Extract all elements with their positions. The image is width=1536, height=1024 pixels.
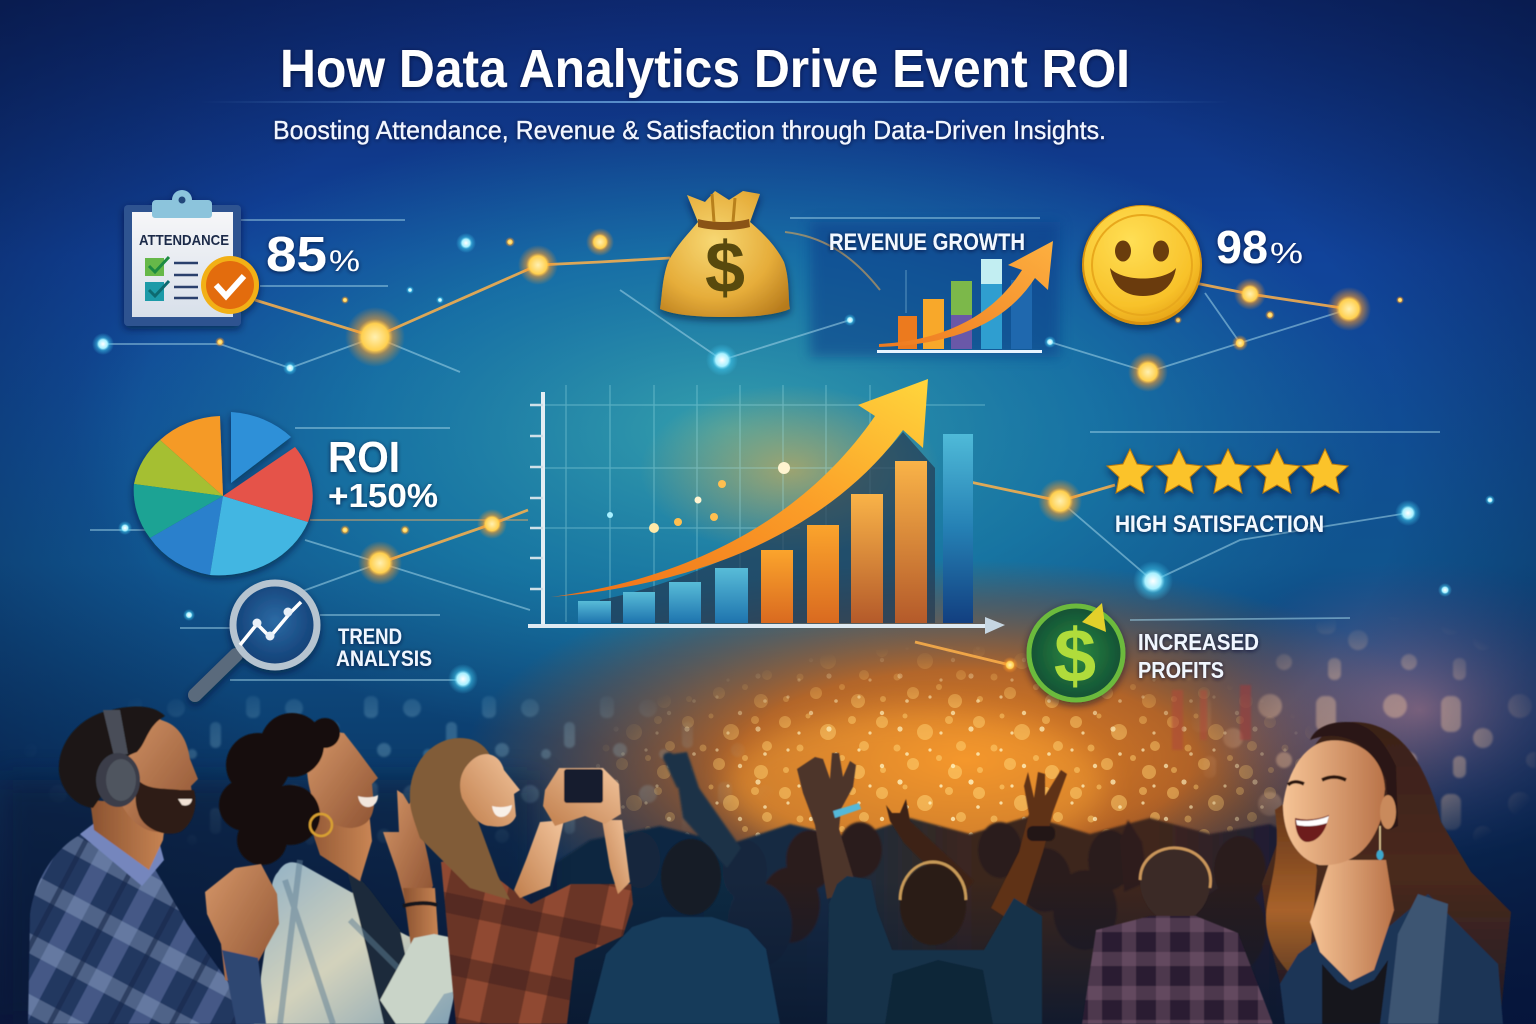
icon: smiley face xyxy=(1082,205,1202,325)
bokeh lights of the crowd xyxy=(168,624,1536,843)
increased profits label: INCREASED xyxy=(1138,629,1259,655)
stat: ROI +150%: +150% xyxy=(328,477,438,514)
stat: 98%: 98 xyxy=(1216,221,1268,273)
icon: increased profits coin xyxy=(1029,603,1123,700)
network connection lines xyxy=(90,218,1440,680)
central bar chart xyxy=(528,379,1005,634)
crowd member in plaid shirt xyxy=(1082,848,1273,1024)
high satisfaction label: HIGH SATISFACTION xyxy=(1115,511,1324,538)
icon: attendance clipboard: ATTENDANCE xyxy=(139,232,229,249)
chart background glow xyxy=(640,385,940,555)
network nodes xyxy=(92,228,1495,694)
icon: attendance clipboard xyxy=(124,190,259,326)
icon: magnifying glass trend xyxy=(195,583,317,695)
title underline xyxy=(200,101,1230,103)
chart: revenue growth xyxy=(877,241,1053,353)
stat: 85%: % xyxy=(329,245,360,278)
icon: money bag xyxy=(660,191,790,317)
trend analysis label: TREND xyxy=(338,624,402,649)
person: woman with curly hair xyxy=(219,713,468,1024)
icon: money bag: $ xyxy=(705,228,745,308)
subtitle: Boosting Attendance, Revenue & Satisfaction through Data-Driven Insights. xyxy=(273,115,1106,145)
stat: ROI +150%: ROI xyxy=(328,433,400,482)
increased profits label: PROFITS xyxy=(1138,657,1224,683)
background crowd silhouettes xyxy=(530,752,1310,1024)
person: woman taking a photo xyxy=(410,738,633,1024)
stat: 85%: 85 xyxy=(266,228,327,282)
trend analysis label: ANALYSIS xyxy=(336,646,432,671)
revenue panel shade xyxy=(810,222,1060,357)
trend analysis label xyxy=(336,624,432,671)
icon: increased profits coin: $ xyxy=(1054,614,1096,699)
crowd member with raised hands xyxy=(797,753,1067,1024)
icon: five stars xyxy=(1107,449,1348,493)
crowd member: man in blue shirt seen from behind xyxy=(588,839,780,1024)
person: man with headphones xyxy=(28,706,262,1024)
stat: 98%: % xyxy=(1270,238,1303,270)
increased profits label xyxy=(1138,629,1259,683)
stat: 85% xyxy=(266,228,360,282)
person: clapping man's hands xyxy=(205,864,279,1024)
stat: 98% xyxy=(1216,221,1303,273)
revenue growth label: REVENUE GROWTH xyxy=(829,229,1025,256)
stat: ROI +150% xyxy=(328,433,438,514)
icon: pie chart xyxy=(134,412,313,575)
title: How Data Analytics Drive Event ROI xyxy=(280,39,1130,99)
person: laughing woman xyxy=(1262,722,1511,1024)
